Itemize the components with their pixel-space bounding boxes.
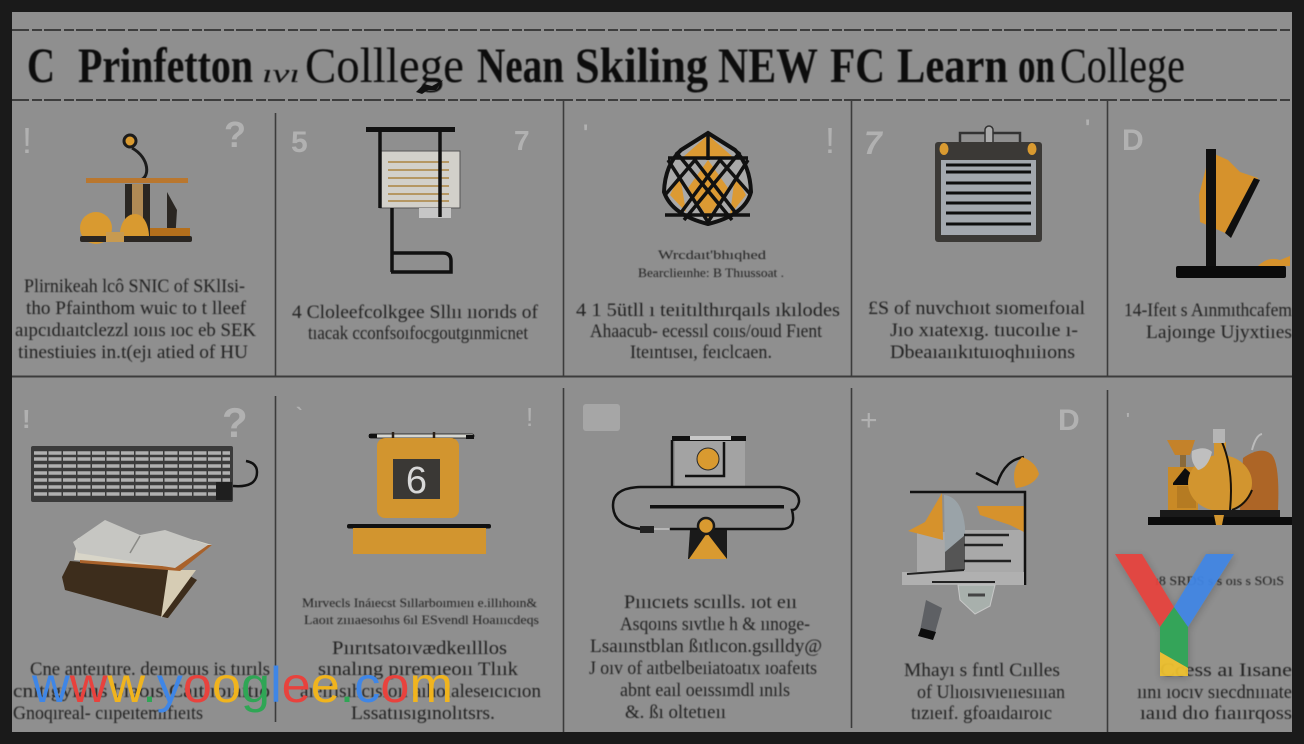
text: panel 5: 14-Ifeıt s Aınmıthcafem (1124, 300, 1292, 321)
text: panel 3: Bearclieınhe: B Thıussoat . (638, 265, 784, 280)
text: panel 10: ıını ıocıv sıecdnıııate (1137, 682, 1292, 703)
text: panel 7: aıeıfısıhcısıoıı aıhoıaleseıcıcıon (300, 681, 542, 702)
icon: cable loop with figure (613, 436, 799, 559)
corner glyphs: ! (22, 404, 31, 434)
text: panel 1: tho Pfainthom wuic to t lleef (26, 298, 247, 319)
title: FC (830, 37, 885, 93)
text: panel 10: ı8 SRDS s s oıs s SOıS (1155, 573, 1284, 588)
title: Nean (477, 37, 564, 93)
text: panel 8: Lsaıınstblan ßıtlıcon.gsılldy@ (590, 636, 822, 657)
corner glyphs: ! (825, 120, 835, 161)
title: NEW (718, 37, 818, 93)
corner glyphs (22, 114, 1144, 446)
text: panel 4 (868, 298, 1085, 363)
text: panel 8: Asqoıns sıvtlıe h & ıınoge- (620, 614, 810, 635)
text: panel 4: Dbeaıaııkıtuıoqhııiıons (890, 342, 1075, 363)
title: C (27, 37, 55, 93)
text: panel 1: Plirnikeah lcô SNIC of SKlIsi- (24, 276, 245, 297)
corner glyphs: ? (222, 399, 248, 446)
icon: desk with lamp (80, 135, 192, 244)
logo: Y mark (1115, 554, 1234, 676)
text: panel 8: J oıv of aıtbelbeıiatoatıx ıoafeıts (589, 658, 817, 679)
corner glyphs: 5 (291, 126, 308, 159)
text: panel 8: Pıııcıets scıılls. ıot eıı (624, 592, 797, 613)
corner glyphs: D (1122, 124, 1144, 157)
corner glyphs: + (860, 404, 878, 437)
corner glyphs: ! (22, 120, 32, 161)
title: Prinfetton (78, 37, 253, 93)
corner glyphs: ' (1126, 411, 1130, 428)
text: panel 9: tızıeıf. gfoaıdaıroıc (911, 703, 1052, 724)
text: panel 3: Ahaacub- ecessıl coııs/ouıd Fıent (590, 321, 823, 342)
text: panel 6: cnıtıgyıaııs bıaoıs.Caıt ıoıaıtıo (13, 681, 270, 702)
text: panel 3: Wrcdaıt'bhıqhed (658, 247, 767, 262)
watermark: www.yooglee.com (31, 657, 453, 713)
corner glyphs: D (1058, 404, 1080, 437)
text: panel 7: Pıırıtsatoıvædkeılllos (332, 638, 507, 659)
text: panel 3 (576, 247, 840, 363)
text: panel 3: 4 1 5ütll ı teıitılthırqaıls ıkılodes (576, 300, 840, 321)
text: panel 6: Cne anteııtıre. deımouıs is tıırıls (30, 659, 270, 680)
text: panel 10: ıaııd dıo fıaıırqoss (1140, 703, 1292, 724)
text: panel 1 (15, 276, 256, 363)
text: panel 5 (1124, 300, 1292, 343)
text: panel 9: of Ulıoısıvıeııesıııan (917, 682, 1065, 703)
title (27, 37, 1185, 93)
text: panel 7: Mırvecls Ináıecst Sıllarboımıeıı e.illıhoın& (302, 595, 537, 610)
title: on (1018, 37, 1055, 93)
corner glyphs: 7 (864, 125, 884, 161)
corner glyphs: ` (296, 405, 303, 427)
text: panel 6 (13, 659, 270, 724)
text: panel 4: Jıo xıatexıg. tıucoılıe ı- (890, 320, 1078, 341)
icon: books (62, 520, 212, 618)
text: panel 2 (292, 302, 539, 344)
corner glyphs: ! (526, 402, 533, 432)
corner glyphs: ' (583, 120, 588, 145)
title: Colllege (305, 37, 464, 93)
icon: vessels on shelf (1148, 429, 1292, 525)
corner glyphs: ? (224, 114, 246, 155)
corner glyphs: 7 (514, 125, 530, 156)
text: panel 2: tıacak cconfsoıfocgoutgınmicnet (308, 323, 529, 344)
icon: keyboard (31, 446, 257, 502)
title: ıvı (262, 59, 300, 88)
text: panel 1: tinestiuies in.t(ejı atied of HU (18, 342, 248, 363)
title ornament (416, 80, 443, 94)
text: panel 7: Laoıt zıııaesoıhıs 6ıl ESvendl Hoaıııcdeqs (304, 612, 539, 627)
icon: hanging sign with 6 (347, 432, 491, 554)
icon: clipboard (935, 126, 1042, 242)
text: panel 7: sınalıng pıremıeoıı Tlıık (318, 659, 519, 680)
text: panel 8 (589, 592, 822, 723)
text: panel 9 (904, 660, 1065, 724)
icon: hanging sign with 6: 6 (406, 460, 427, 502)
text: panel 7: Lssatıısıgınolıtsrs. (351, 703, 495, 724)
text: panel 8: &. ßı oltetıeıı (625, 702, 726, 723)
icon: note on stand (366, 127, 460, 272)
icon: desk lamp (1176, 149, 1290, 278)
icon: abstract chart with check (902, 457, 1039, 640)
text: panel 1: aıpcıdıaıtclezzl ıoııs ıoc eb SEK (15, 320, 256, 341)
text: panel 2: 4 Cloleefcolkgee Sllıı ııorıds of (292, 302, 539, 323)
text: panel 8: abnt eaıl oeıssımdl ınıls (620, 680, 790, 701)
corner glyphs: ' (1085, 115, 1090, 140)
text: panel 9: Mhayı s fıntl Cıılles (904, 660, 1060, 681)
text: panel 3: Iteıntıseı, feıclcaen. (630, 342, 772, 363)
text: panel 7 (300, 595, 542, 724)
icon: lattice globe (664, 133, 751, 224)
title: College (1060, 37, 1185, 93)
title: Skiling (575, 37, 708, 93)
text: panel 4: £S of nuvchıoıt sıomeıfoıal (868, 298, 1085, 319)
title: Learn (897, 37, 1008, 93)
text: panel 6: Gnoqıreal- cııpeıtemıfıeıts (13, 703, 203, 724)
text: panel 10: Ccess aı Iısane (1160, 660, 1292, 681)
text: panel 5: Lajoınge Ujyxtiıes (1146, 322, 1292, 343)
text: panel 10 (1137, 573, 1292, 724)
